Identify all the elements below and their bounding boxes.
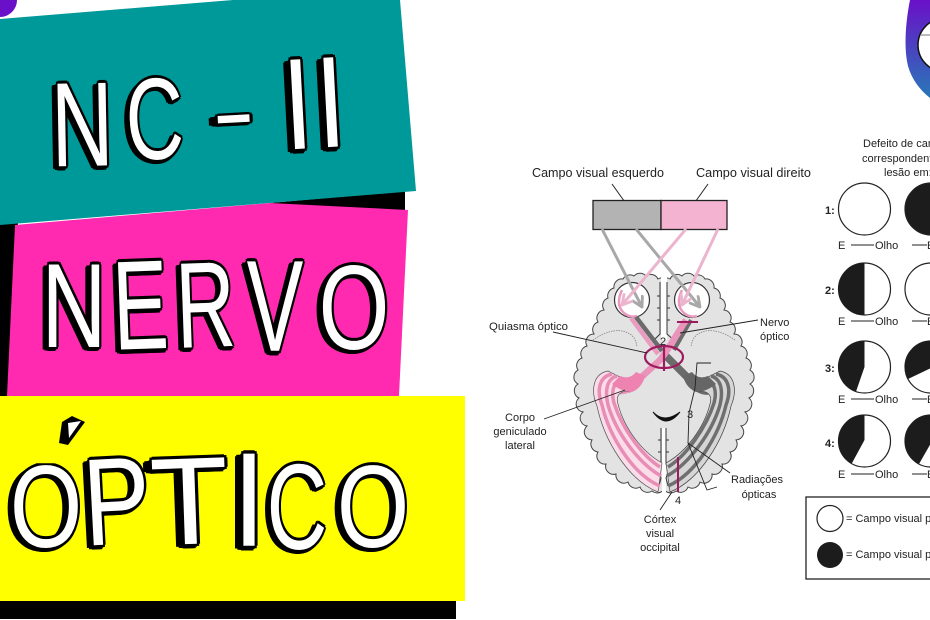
heading: ÓPTICO: P	[80, 431, 154, 573]
heading: NERVO: V	[247, 234, 303, 379]
diagram labels: visual	[646, 528, 674, 540]
optic pathway: temporal gray fibres	[636, 317, 662, 351]
brain outline left	[574, 273, 664, 493]
diagram labels: óptico	[760, 331, 789, 343]
arrows from visual field to eyes	[602, 229, 718, 307]
lesion marker 2: chiasm	[645, 346, 683, 371]
diagram labels: Corpo	[505, 412, 535, 424]
defect row 3: E	[838, 394, 845, 406]
magenta banner	[7, 203, 408, 396]
heading: ÓPTICO: O	[337, 442, 409, 573]
heading: ÓPTICO	[8, 425, 409, 576]
lesion marker 4	[677, 457, 679, 492]
eye circles	[614, 282, 710, 318]
diagram labels: occipital	[640, 542, 680, 554]
heading: ÓPTICO: T	[148, 431, 231, 572]
defect row 2: 2:	[825, 285, 835, 297]
defect row 1: 1:	[825, 205, 835, 217]
lesion numbers	[660, 336, 693, 507]
defect row 1: Olho	[875, 240, 898, 252]
black shadow under teal banner	[270, 191, 405, 212]
defect row 4	[825, 415, 930, 481]
defect row 3: Olho	[875, 394, 898, 406]
lesion numbers: 2	[660, 336, 666, 348]
heading: ÓPTICO: Ó	[10, 442, 82, 573]
diagram labels: geniculado	[493, 426, 547, 438]
defect row 4: 4:	[825, 438, 835, 450]
lesion numbers: 4	[675, 495, 681, 507]
heading: NERVO	[42, 234, 389, 379]
heading: NC - II: I	[312, 29, 349, 176]
heading: NERVO: R	[174, 236, 238, 375]
yellow banner	[0, 396, 465, 601]
optic pathway: crossing gray fibres	[664, 354, 712, 391]
defect row 3	[825, 341, 930, 406]
heading: NC - II: -	[209, 58, 258, 166]
diagram labels: lateral	[505, 440, 535, 452]
midline fissures	[653, 282, 675, 486]
defect row 2: Olho	[875, 316, 898, 328]
right optic radiations	[666, 371, 734, 492]
defect row 4: E	[838, 469, 845, 481]
brain diagram	[574, 273, 754, 507]
diagram labels: Radiações	[731, 474, 783, 486]
brain outline right	[664, 273, 754, 493]
left optic radiations	[594, 371, 662, 492]
diagram labels: Quiasma óptico	[489, 321, 568, 333]
visual field defect heading	[862, 138, 930, 179]
visual field labels and bar	[532, 165, 811, 230]
defect row 3: 3:	[825, 363, 835, 375]
optic pathway: crossing pink fibres	[614, 320, 686, 391]
diagram labels: Córtex	[644, 514, 677, 526]
lesion marker 1	[677, 321, 698, 323]
defect row 1	[825, 183, 930, 252]
lesion numbers: 3	[687, 409, 693, 421]
diagram labels: ópticas	[742, 489, 777, 501]
heading: NC - II: N	[50, 57, 114, 193]
bracket for lesion 3	[688, 363, 717, 490]
label: left visual field: Campo visual esquerdo	[532, 165, 664, 180]
diagram labels: Nervo	[760, 317, 789, 329]
label: right visual field: Campo visual direito	[696, 165, 811, 180]
defect row 2: E	[838, 316, 845, 328]
teal banner	[0, 0, 416, 225]
legend box	[806, 497, 930, 579]
left field bar	[593, 200, 661, 230]
heading: NC - II	[50, 29, 349, 193]
leader lines	[544, 320, 758, 510]
heading: ÓPTICO: I	[232, 425, 266, 575]
heading: ÓPTICO: C	[267, 439, 327, 576]
heading: NERVO: O	[319, 241, 389, 375]
defect row 2	[825, 263, 930, 328]
optic pathway: right eye nerve	[674, 320, 691, 350]
heading: NC - II: C	[123, 54, 186, 185]
logo fragment top left	[0, 0, 17, 17]
black shadow under yellow banner	[0, 600, 456, 619]
right field bar	[661, 200, 727, 230]
black shadow left of magenta banner	[0, 222, 18, 398]
heading: NC - II: I	[279, 31, 316, 178]
defect row 4: Olho	[875, 469, 898, 481]
accent mark of Ó	[59, 416, 85, 445]
logo top right	[906, 0, 930, 98]
heading: NERVO: N	[42, 239, 106, 373]
heading: NERVO: E	[110, 234, 171, 378]
optic pathway: left eye pink fibres	[631, 318, 658, 354]
diagram labels	[489, 317, 789, 554]
defect row 1: E	[838, 240, 845, 252]
